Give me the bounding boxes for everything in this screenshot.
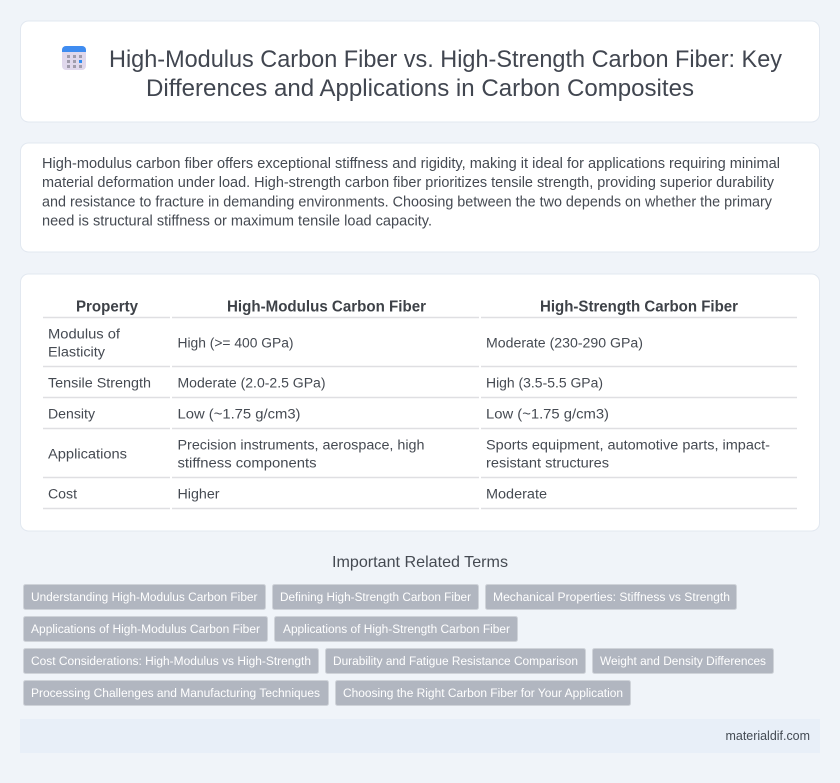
tag xyxy=(336,680,630,706)
tag: Defining High-Strength Carbon Fiber xyxy=(280,590,471,604)
tag xyxy=(24,680,328,706)
text block: introduction paragraph: material deformation under load. High-strength carbon fiber prioritizes tensile strength, providing superior durability xyxy=(42,175,775,191)
table row: tensile strength: High (3.5-5.5 GPa) xyxy=(486,376,603,392)
table row: tensile strength: Tensile Strength xyxy=(48,376,151,392)
table row: applications: Sports equipment, automotive parts, impact- xyxy=(486,438,770,454)
tag: Processing Challenges and Manufacturing Techniques xyxy=(31,686,320,700)
table header row: High-Strength Carbon Fiber xyxy=(540,298,738,316)
table row: modulus of elasticity: Elasticity xyxy=(48,344,106,360)
table row: modulus of elasticity: High (>= 400 GPa) xyxy=(178,336,294,352)
tag: Understanding High-Modulus Carbon Fiber xyxy=(31,590,258,604)
table row: density: Low (~1.75 g/cm3) xyxy=(178,406,300,422)
tag xyxy=(24,584,266,610)
table header row xyxy=(43,298,797,318)
table row: applications: Precision instruments, aerospace, high xyxy=(178,438,424,454)
tag: Choosing the Right Carbon Fiber for Your Application xyxy=(343,686,623,700)
tag: Cost Considerations: High-Modulus vs High-Strength xyxy=(31,654,311,668)
tag: Durability and Fatigue Resistance Comparison xyxy=(333,654,578,668)
table header row: High-Modulus Carbon Fiber xyxy=(227,298,426,316)
footer source text: materialdif.com xyxy=(726,729,810,743)
text block: introduction paragraph: need is structural stiffness or maximum tensile load capacity. xyxy=(42,214,432,230)
tag: Applications of High-Strength Carbon Fiber xyxy=(283,622,510,636)
tag: Mechanical Properties: Stiffness vs Strength xyxy=(493,590,730,604)
related term tags xyxy=(24,584,774,706)
panel: comparison table xyxy=(20,274,820,531)
tag xyxy=(272,584,478,610)
table row: density xyxy=(43,406,797,428)
footer xyxy=(20,719,820,753)
table row: cost: Higher xyxy=(178,486,220,502)
table row: applications: Applications xyxy=(48,446,127,462)
heading: important related terms: Important Related Terms xyxy=(332,554,508,571)
table row: modulus of elasticity: Modulus of xyxy=(48,326,120,342)
text block: introduction paragraph: High-modulus carbon fiber offers exceptional stiffness and rigidity, making it ideal for applications requiring minimal xyxy=(42,156,780,172)
panel: introduction xyxy=(20,143,820,252)
heading: title: Differences and Applications in Carbon Composites xyxy=(146,75,694,102)
text block: introduction paragraph xyxy=(42,156,780,230)
table header row: Property xyxy=(76,298,138,316)
table row: applications xyxy=(43,438,797,478)
table row: cost: Moderate xyxy=(486,486,547,502)
tag: Weight and Density Differences xyxy=(600,654,766,668)
table row: modulus of elasticity: Moderate (230-290 GPa) xyxy=(486,336,643,352)
table row: density: Density xyxy=(48,406,96,422)
tag xyxy=(24,616,268,642)
heading: title xyxy=(109,46,782,102)
icon: calendar xyxy=(62,46,86,70)
table row: cost xyxy=(43,486,797,508)
tag: Applications of High-Modulus Carbon Fiber xyxy=(31,622,260,636)
heading: title: High-Modulus Carbon Fiber vs. High-Strength Carbon Fiber: Key xyxy=(109,46,782,73)
panel: title header xyxy=(20,21,820,122)
table row: cost: Cost xyxy=(48,486,77,502)
tag xyxy=(486,584,736,610)
text block: introduction paragraph: and resistance to fracture in demanding environments. Choosing between the two depends on whether the primary xyxy=(42,194,773,210)
tag xyxy=(24,648,318,674)
table row: modulus of elasticity xyxy=(43,326,797,366)
tag xyxy=(274,616,518,642)
tag xyxy=(326,648,586,674)
table row: tensile strength: Moderate (2.0-2.5 GPa) xyxy=(178,376,326,392)
table row: density: Low (~1.75 g/cm3) xyxy=(486,406,609,422)
table row: applications: stiffness components xyxy=(178,456,316,472)
table row: applications: resistant structures xyxy=(486,456,609,472)
tag xyxy=(592,648,774,674)
table row: tensile strength xyxy=(43,376,797,398)
